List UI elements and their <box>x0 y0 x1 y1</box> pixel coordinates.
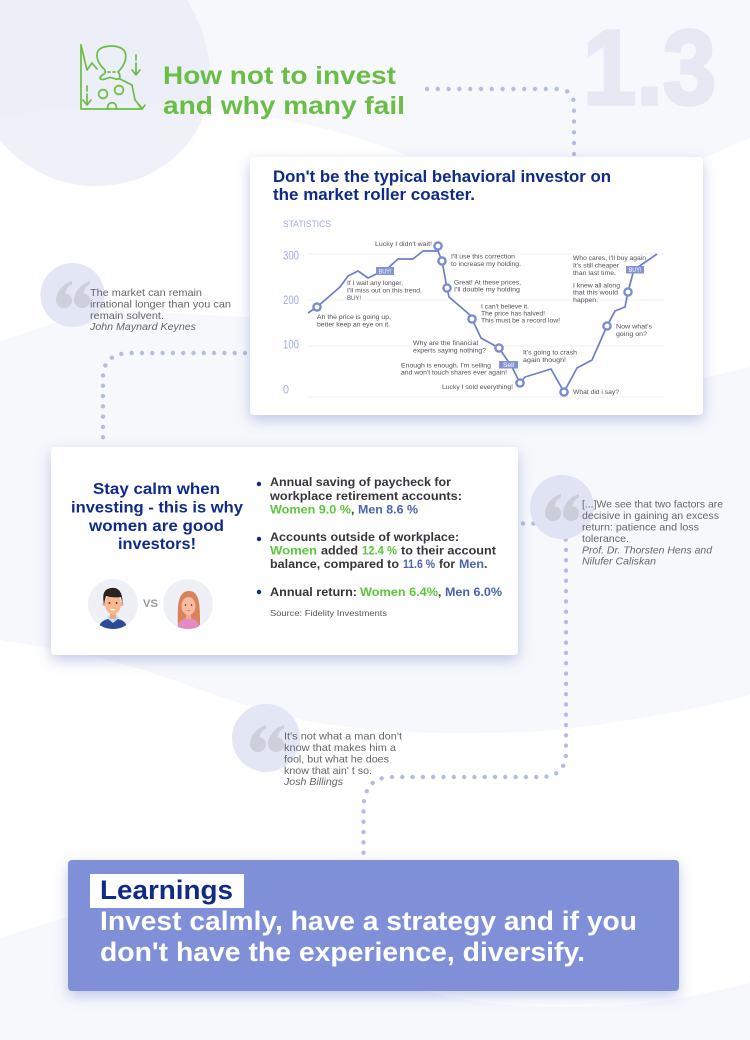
chart annotations: again though! <box>523 357 566 364</box>
chart annotations: better keep an eye on it. <box>317 322 390 328</box>
chart annotations: The price has halved! <box>481 310 545 318</box>
learnings text: don't have the experience, diversify. <box>100 937 585 967</box>
bullet: annual saving: workplace retirement accounts: <box>269 489 462 503</box>
heading <box>273 168 611 204</box>
chart annotations: Lucky I sold everything! <box>442 384 513 391</box>
bullet: accounts outside workplace <box>257 530 496 571</box>
bullet: annual saving: Men 8.6 % <box>358 502 418 516</box>
bullet: annual return: Men 6.0% <box>445 585 502 599</box>
quote text: return: patience and loss <box>582 522 699 534</box>
quote text: irrational longer than you can <box>90 300 231 310</box>
chart annotations: Great! At these prices, <box>454 280 521 286</box>
price line <box>308 251 657 392</box>
icon: quote bubble <box>40 263 104 327</box>
source: Source: Fidelity Investments <box>270 608 387 618</box>
y axis labels: 300 <box>283 250 299 262</box>
chart annotations: Ah the price is going up, <box>317 314 391 321</box>
quote text: remain solvent. <box>90 311 164 322</box>
bullet: annual return: , <box>438 585 441 599</box>
bullet: annual saving <box>257 475 462 516</box>
panel heading: investing - this is why <box>71 500 243 516</box>
chart annotations: It's still cheaper <box>573 262 620 270</box>
bullet: accounts outside workplace: 11.6 % <box>403 557 435 571</box>
title: and why many fail <box>163 92 405 120</box>
chart annotations: going on? <box>616 331 647 338</box>
chart annotations: happen. <box>573 297 598 304</box>
heading: the market roller coaster. <box>273 186 475 204</box>
chart annotations: I'll use this correction <box>451 254 515 260</box>
title <box>163 62 405 120</box>
icon: man avatar <box>88 579 138 629</box>
panel heading: women are good <box>88 518 224 535</box>
panel heading <box>71 481 243 553</box>
chart annotations <box>317 241 653 396</box>
connector: stay calm card to learnings <box>364 524 566 860</box>
icon: falling market chart with money bag <box>81 45 145 109</box>
chart annotations: Why are the financial <box>413 340 479 347</box>
quote text: [...]We see that two factors are <box>582 500 723 510</box>
quote text: know that ain' t so. <box>284 766 372 777</box>
chart label: STATISTICS <box>283 219 331 230</box>
panel heading: Stay calm when <box>93 481 220 498</box>
section number: 1.3 <box>583 9 716 127</box>
connector: title to chart card <box>427 89 574 156</box>
markers <box>313 242 632 396</box>
chart annotations: experts saying nothing? <box>413 348 486 354</box>
bullet: accounts outside workplace: Accounts outside of workplace: <box>270 530 459 544</box>
buy and sell tags <box>376 266 644 369</box>
chart annotations: that this would <box>573 290 618 296</box>
quote text: It's not what a man don't <box>284 732 402 742</box>
chart annotations: BUY! <box>347 295 361 302</box>
learnings text: Invest calmly, have a strategy and if you <box>100 906 637 936</box>
chart annotations: and won't touch shares ever again! <box>401 370 507 376</box>
bullet: accounts outside workplace: for <box>439 557 455 571</box>
icon: quote bubble <box>530 475 594 539</box>
quote text <box>283 732 402 788</box>
bullet: annual saving: Annual saving of paycheck for <box>270 475 451 489</box>
chart annotations: If I wait any longer, <box>347 280 403 287</box>
chart annotations: This must be a record low! <box>481 318 560 324</box>
learnings tag: Learnings <box>100 875 233 905</box>
chart annotations: It's going to crash <box>523 350 577 356</box>
quote text: tolerance. <box>582 534 629 545</box>
icon: quote bubble <box>232 704 300 772</box>
connector: quote to stay calm card <box>103 353 245 447</box>
quote text: Nilufer Caliskan <box>582 556 656 568</box>
y axis labels <box>283 250 299 396</box>
chart annotations: Who cares, I'll buy again <box>573 255 646 262</box>
quote text <box>582 500 723 568</box>
versus label: VS <box>143 598 158 610</box>
bullet: annual return: Women 6.4% <box>360 585 438 599</box>
buy and sell tags: BUY! <box>628 267 642 274</box>
learnings text <box>100 906 637 967</box>
chart annotations: I'll miss out on this trend. <box>347 288 422 294</box>
chart annotations: I knew all along <box>573 282 620 290</box>
chart annotations: I can't believe it. <box>481 304 529 310</box>
bullet: accounts outside workplace: Women <box>270 544 317 558</box>
quote text: decisive in gaining an excess <box>582 511 719 522</box>
panel: stay calm, women are good investors <box>51 447 518 655</box>
quote text: Prof. Dr. Thorsten Hens and <box>582 546 712 556</box>
title: How not to invest <box>163 62 397 90</box>
chart annotations: Lucky I didn't wait! <box>375 241 432 248</box>
bullet: accounts outside workplace: Men <box>459 557 484 571</box>
bullet: accounts outside workplace: 12.4 % <box>362 544 397 558</box>
bullet: annual saving: , <box>351 502 354 516</box>
quote text <box>89 288 231 333</box>
chart annotations: What did i say? <box>573 389 619 396</box>
bullet: annual return: Annual return: <box>270 585 357 599</box>
chart annotations: than last time. <box>573 270 616 277</box>
bullet: annual saving: Women 9.0 % <box>270 502 351 516</box>
quote text: John Maynard Keynes <box>89 322 196 333</box>
bullet: accounts outside workplace: added <box>321 544 358 558</box>
chart annotations: to increase my holding. <box>451 261 521 268</box>
bullet: accounts outside workplace: . <box>484 557 487 571</box>
quote text: fool, but what he does <box>284 754 389 766</box>
quote: Josh Billings <box>232 704 402 788</box>
icon: woman avatar <box>163 579 213 629</box>
buy and sell tags: BUY! <box>378 268 392 275</box>
panel heading: investors! <box>118 536 196 553</box>
panel: market roller coaster chart <box>250 157 703 415</box>
y axis labels: 0 <box>283 384 289 396</box>
quote text: Josh Billings <box>283 777 343 788</box>
quote: Hens and Caliskan <box>530 475 723 568</box>
line chart <box>283 241 665 397</box>
y axis labels: 200 <box>283 295 299 307</box>
chart annotations: I'll double my holding <box>454 286 520 294</box>
bullet: accounts outside workplace: balance, compared to <box>270 557 399 571</box>
heading: Don't be the typical behavioral investor on <box>273 168 611 186</box>
y axis labels: 100 <box>283 340 299 352</box>
bullet: annual return <box>257 585 502 599</box>
panel: learnings <box>68 860 679 991</box>
quote text: know that makes him a <box>284 743 396 754</box>
chart annotations: Enough is enough. I'm selling <box>401 362 491 370</box>
quote: John Maynard Keynes <box>40 263 231 333</box>
buy and sell tags: Sell <box>503 362 514 369</box>
chart annotations: Now what's <box>616 324 653 330</box>
quote text: The market can remain <box>90 288 202 299</box>
bullet: accounts outside workplace: to their account <box>401 544 496 558</box>
